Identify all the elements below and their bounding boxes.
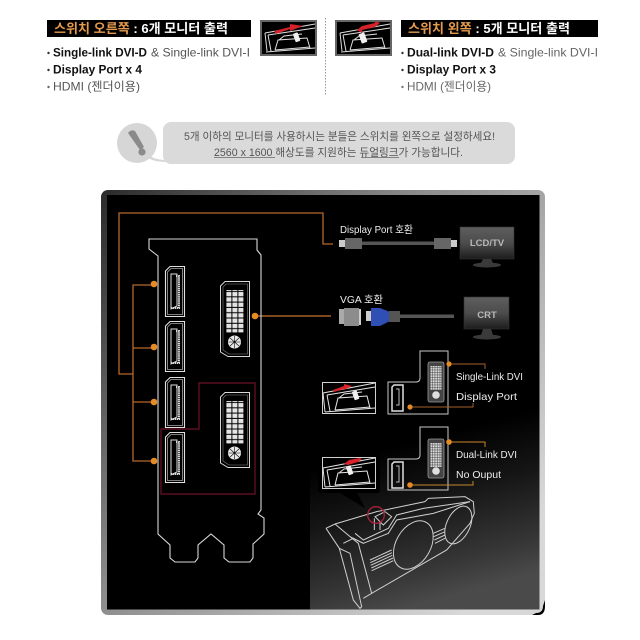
text: ports list right: HDMI (젠더이용)	[53, 80, 140, 94]
display port 2	[166, 322, 184, 372]
display port 3	[166, 378, 184, 428]
heading: switch right: 스위치 오른쪽 : 6개 모니터 출력	[54, 21, 228, 36]
text: ports list right: Display Port x 4	[53, 62, 142, 76]
label: display port: Display Port 호환	[340, 224, 413, 236]
cable: VGA	[339, 308, 454, 326]
icon: exclamation	[117, 123, 166, 163]
text: ports list left: Display Port x 3	[407, 62, 496, 76]
display port 4	[166, 432, 184, 482]
text: ports list right: Single-link DVI-D	[53, 46, 147, 60]
cable: display port	[339, 238, 457, 249]
panel: connection diagram	[101, 190, 545, 615]
diagram: dual-link configuration: Dual-Link DVI	[456, 449, 517, 461]
diagram: dual-link configuration	[318, 427, 517, 508]
monitor: LCD/TV	[460, 227, 514, 268]
monitor: CRT: CRT	[477, 310, 497, 321]
illustration: graphics card	[326, 497, 477, 608]
DVI port 1	[220, 282, 250, 356]
diagram: single-link configuration: Single-Link DVI	[456, 371, 523, 383]
text: ports list right	[47, 46, 250, 94]
wiring dots	[151, 281, 258, 464]
text: ports list left: Dual-link DVI-D	[407, 46, 494, 60]
monitor: CRT	[464, 297, 509, 340]
text: ports list left	[401, 46, 598, 94]
graphics card bracket outline	[149, 239, 264, 562]
diagram: single-link configuration: Display Port	[456, 391, 517, 403]
text: ports list left: & Single-link DVI-I	[498, 46, 598, 60]
callout: note	[117, 122, 515, 164]
orange wiring	[119, 213, 333, 461]
DVI port 2	[220, 392, 250, 468]
text: note: 5개 이하의 모니터를 사용하시는 분들은 스위치를 왼쪽으로 설정하세요!	[184, 129, 495, 143]
text: ports list right: & Single-link DVI-I	[151, 46, 250, 60]
diagram: dual-link configuration: No Ouput	[456, 469, 501, 481]
icon: switch left	[335, 20, 392, 56]
text: note: 2560 x 1600 해상도를 지원하는 듀얼링크가 가능합니다.	[214, 145, 463, 159]
panel: switch right	[47, 20, 317, 94]
monitor: LCD/TV: LCD/TV	[470, 238, 505, 249]
panel: switch left	[335, 20, 598, 94]
text: ports list left: HDMI (젠더이용)	[407, 80, 491, 94]
icon: switch position left	[322, 458, 376, 488]
red highlight area	[161, 383, 255, 494]
label: VGA: VGA 호환	[340, 294, 383, 306]
callout: switch pointer	[318, 454, 380, 508]
text: note	[184, 129, 495, 159]
heading: switch left: 스위치 왼쪽 : 5개 모니터 출력	[408, 21, 570, 36]
icon: switch position right	[322, 382, 376, 414]
diagram: single-link configuration	[322, 351, 523, 414]
icon: switch right	[260, 20, 317, 56]
display port 1	[166, 266, 184, 316]
